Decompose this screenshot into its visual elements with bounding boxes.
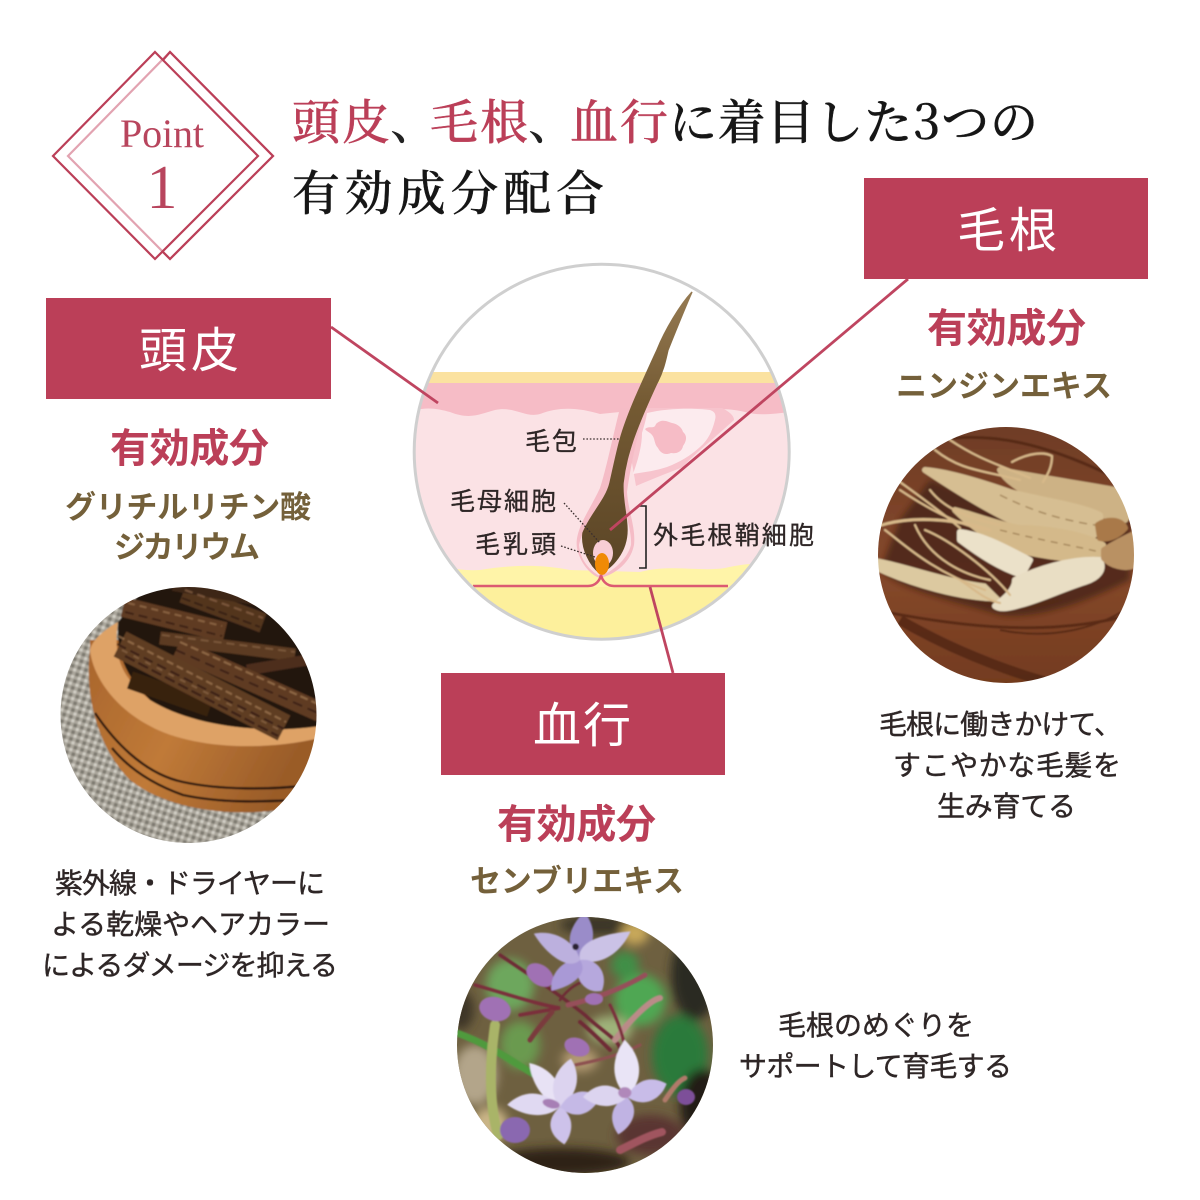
ingredient name: グリチルリチン酸 [65, 490, 311, 525]
diagram labels: 毛包 [525, 428, 577, 456]
flower lower left [507, 1059, 600, 1144]
title: 、 [528, 84, 576, 153]
label box: 毛根: 毛根 [957, 205, 1057, 258]
description [739, 1010, 1012, 1082]
dotted leaders [561, 439, 620, 557]
diagram labels: 毛乳頭 [475, 531, 556, 559]
title: 頭皮 [292, 84, 390, 153]
description: よる乾燥やヘアカラー [51, 909, 330, 940]
hair shaft [583, 292, 692, 573]
photo: licorice root in bowl [60, 587, 316, 843]
ingredient name: ジカリウム [114, 530, 260, 565]
flower lower right [583, 1040, 667, 1134]
ingredient name [65, 490, 311, 565]
diagram: hair root cross-section [400, 264, 814, 650]
description: 紫外線・ドライヤーに [55, 868, 325, 899]
shadow under roots [880, 480, 1130, 616]
outer ring [414, 264, 789, 639]
description: サポートして育毛する [739, 1051, 1012, 1082]
panel: hair root [864, 178, 1150, 822]
description [879, 709, 1122, 822]
label box: 血行: 血行 [533, 700, 631, 753]
description: 毛根に働きかけて、 [879, 709, 1122, 740]
blood vessel [473, 575, 728, 586]
follicle sheath [577, 408, 645, 578]
description: すこやかな毛髪を [893, 750, 1121, 781]
title: 血行 [570, 84, 668, 153]
heading: active ingredient: 有効成分 [110, 427, 269, 471]
dermal papilla [593, 540, 613, 575]
badge: Point 1: 1 [146, 154, 178, 222]
sebaceous gland [628, 408, 734, 486]
title: 毛根 [430, 84, 528, 153]
title [292, 84, 1038, 224]
description [42, 868, 338, 981]
description: によるダメージを抑える [42, 950, 338, 981]
photo: ginseng roots [878, 427, 1134, 683]
label box: 頭皮 [46, 298, 331, 399]
badge: Point 1: Point [120, 111, 204, 156]
connector lines [331, 279, 908, 673]
diagram labels [450, 428, 814, 559]
diagram labels: 毛母細胞 [450, 488, 556, 516]
flower top [534, 912, 631, 991]
description: 生み育てる [937, 791, 1076, 822]
skin layers [416, 372, 788, 638]
heading: active ingredient: 有効成分 [927, 307, 1086, 351]
label box: 毛根 [864, 178, 1148, 279]
diagram labels: 外毛根鞘細胞 [653, 522, 814, 550]
roots [878, 470, 1134, 608]
label box: 血行 [441, 673, 725, 775]
ingredient name: センブリエキス [470, 864, 684, 899]
badge: Point 1 [53, 52, 273, 259]
heading: active ingredient: 有効成分 [497, 803, 656, 847]
panel: scalp [42, 298, 338, 981]
ingredient name: ニンジンエキス [896, 369, 1112, 404]
bracket [639, 506, 646, 568]
title: 有効成分配合 [292, 155, 604, 224]
title: 、 [390, 84, 438, 153]
panel: blood flow [441, 673, 1012, 1180]
title: に着目した3つの [669, 84, 1038, 153]
label box: 頭皮: 頭皮 [139, 325, 239, 378]
photo: senburi flowers [457, 917, 713, 1173]
description: 毛根のめぐりを [778, 1010, 974, 1041]
